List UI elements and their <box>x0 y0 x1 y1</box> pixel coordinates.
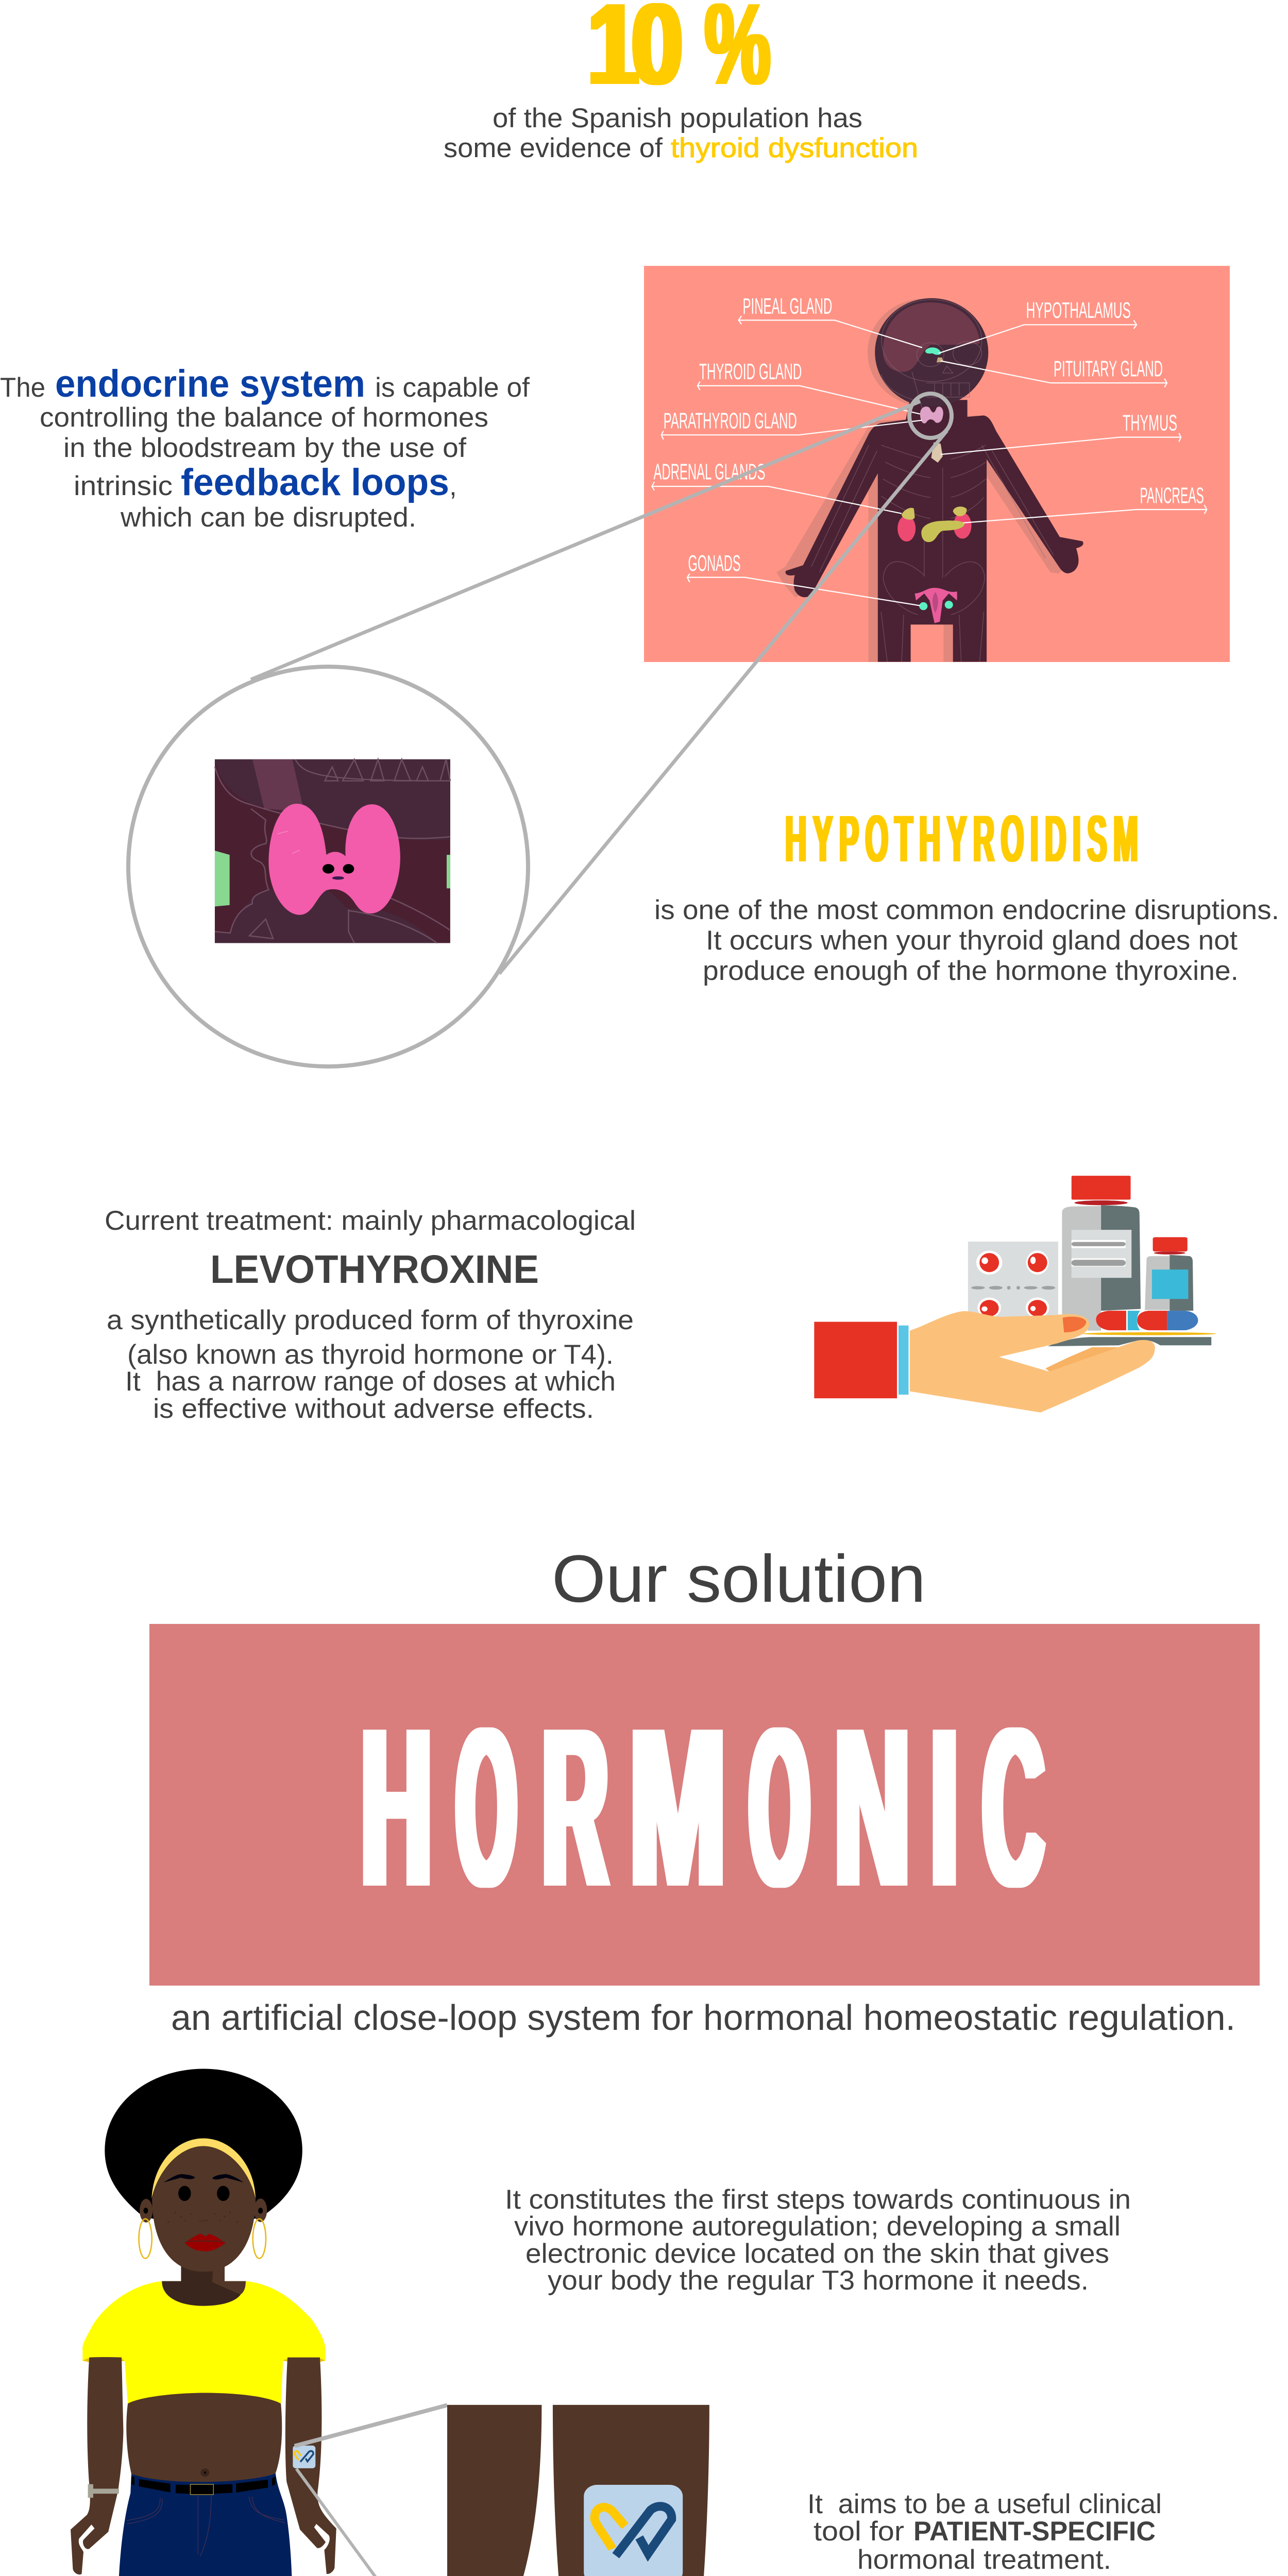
blister pack <box>968 1242 1058 1319</box>
jeans stitching <box>127 2496 285 2576</box>
text: tagline: an artificial close-loop system for hormonal homeostatic regulation. <box>171 1997 1235 2038</box>
earrings <box>139 2219 266 2259</box>
belt <box>131 2476 276 2495</box>
gland labels: GONADS <box>688 550 741 576</box>
patch on arm <box>293 2446 315 2468</box>
skeleton <box>811 299 1054 662</box>
heading: hypothyroidism: HYPOTHYROIDISM <box>785 802 1138 876</box>
neck and chest <box>181 2261 246 2294</box>
text block: endocrine system: endocrine system <box>55 362 365 405</box>
text block: endocrine system: in the bloodstream by the use of <box>63 433 466 463</box>
right arm <box>285 2358 336 2574</box>
text block: patient-specific treatment: It aims to be a useful clinical <box>807 2489 1162 2519</box>
banner: hormonic: O <box>750 1681 809 1934</box>
organ: adrenal glands <box>902 508 915 520</box>
text block: continuous autoregulation <box>505 2184 1131 2296</box>
close-up: forearm and torso with device <box>447 2405 709 2576</box>
freckles and nose <box>167 2212 238 2223</box>
text block: continuous autoregulation: your body the regular T3 hormone it needs. <box>548 2265 1089 2296</box>
text block: hypothyroidism description: is one of the most common endocrine disruptions. <box>654 895 1279 925</box>
ears <box>140 2199 152 2223</box>
lips <box>184 2234 226 2251</box>
text block: endocrine system <box>0 362 530 533</box>
text block: continuous autoregulation: electronic device located on the skin that gives <box>526 2239 1109 2269</box>
banner: hormonic: N <box>835 1681 910 1934</box>
organ: pancreas <box>921 520 964 542</box>
text block: current treatment: is effective without adverse effects. <box>153 1394 594 1424</box>
organ: ovaries <box>919 602 927 610</box>
text block: continuous autoregulation: It constitutes the first steps towards continuous in <box>505 2184 1131 2215</box>
text block: endocrine system: is capable of <box>375 372 530 403</box>
text block: patient-specific treatment: hormonal treatment. <box>857 2545 1111 2575</box>
body shadow <box>776 299 1074 662</box>
thyroid gland <box>268 804 400 915</box>
text block: endocrine system: The <box>0 372 45 403</box>
wristband <box>88 2484 119 2498</box>
banner: hormonic: R <box>543 1681 608 1934</box>
text block: current treatment: (also known as thyroid hormone or T4). <box>127 1340 614 1370</box>
eyebrows and eyes <box>163 2174 244 2201</box>
organ: pituitary <box>937 358 943 363</box>
banner: hormonic <box>149 1624 1260 1986</box>
text block: Spanish population statistic: of the Spanish population has <box>493 103 862 133</box>
text block: current treatment: LEVOTHYROXINE <box>210 1247 539 1292</box>
text block: endocrine system: , <box>449 471 457 501</box>
text block: current treatment: Current treatment: mainly pharmacological <box>105 1206 636 1236</box>
navel <box>200 2468 210 2477</box>
gland labels: THYMUS <box>1123 410 1177 435</box>
headband <box>151 2139 256 2199</box>
hair <box>105 2069 302 2218</box>
organ: uterus <box>915 588 957 623</box>
banner: hormonic: C <box>983 1681 1044 1934</box>
text block: hypothyroidism description: It occurs when your thyroid gland does not <box>706 925 1238 956</box>
capsules <box>1096 1311 1198 1330</box>
body silhouette <box>786 400 1083 662</box>
organ: kidneys <box>897 516 916 541</box>
face <box>152 2146 256 2272</box>
gland labels: PARATHYROID GLAND <box>664 408 797 433</box>
shirt <box>82 2281 325 2403</box>
illustration: hand holding medication <box>814 1176 1216 1413</box>
text block: endocrine system: intrinsic <box>74 471 173 501</box>
torso <box>126 2393 282 2482</box>
magnifier: zoom lines and circles <box>128 394 952 1066</box>
text block: continuous autoregulation: vivo hormone autoregulation; developing a small <box>514 2211 1121 2242</box>
text block: hypothyroidism description: produce enough of the hormone thyroxine. <box>703 956 1239 986</box>
small bottle <box>1145 1237 1193 1311</box>
label leader lines <box>652 316 1207 605</box>
cuff <box>814 1322 897 1398</box>
text block: patient-specific treatment <box>807 2489 1162 2575</box>
gland labels: ADRENAL GLANDS <box>654 459 765 484</box>
banner: hormonic: H <box>361 1681 432 1934</box>
text block: Spanish population statistic <box>444 103 918 163</box>
organ: hypothalamus <box>925 347 941 355</box>
text block: patient-specific treatment: PATIENT-SPECIFIC <box>913 2516 1156 2547</box>
text block: current treatment <box>105 1206 636 1424</box>
text block: patient-specific treatment: tool for <box>814 2516 904 2547</box>
callout lines <box>295 2405 447 2576</box>
thyroid close-up image <box>215 759 450 943</box>
text block: endocrine system: feedback loops <box>181 462 449 503</box>
text block: current treatment: It has a narrow range of doses at which <box>125 1366 616 1397</box>
left arm <box>71 2357 123 2574</box>
text block: endocrine system: which can be disrupted. <box>120 502 416 533</box>
brain <box>883 302 980 372</box>
panel: endocrine system body diagram <box>644 266 1230 662</box>
hand <box>910 1311 1155 1413</box>
text block: Spanish population statistic: some evidence of <box>444 133 663 163</box>
heading: our solution: Our solution <box>552 1541 926 1616</box>
gland labels: THYROID GLAND <box>699 359 802 384</box>
organ: thyroid <box>920 406 943 423</box>
large bottle <box>1062 1176 1141 1331</box>
gland labels <box>654 293 1204 576</box>
gland labels: PINEAL GLAND <box>743 293 832 319</box>
statistic: 10 percent <box>588 0 771 109</box>
banner: hormonic: M <box>630 1681 726 1934</box>
text block: endocrine system: controlling the balance of hormones <box>40 402 488 433</box>
text block: current treatment: a synthetically produced form of thyroxine <box>107 1305 634 1335</box>
text block: Spanish population statistic: thyroid dysfunction <box>671 133 918 163</box>
organ: thymus <box>931 442 943 463</box>
text block: hypothyroidism description <box>654 895 1279 986</box>
banner: hormonic: I <box>931 1681 958 1934</box>
head <box>875 298 988 406</box>
tray <box>1048 1332 1216 1346</box>
illustration: woman <box>71 2069 709 2576</box>
jeans <box>118 2473 293 2576</box>
banner: hormonic: O <box>456 1681 516 1934</box>
